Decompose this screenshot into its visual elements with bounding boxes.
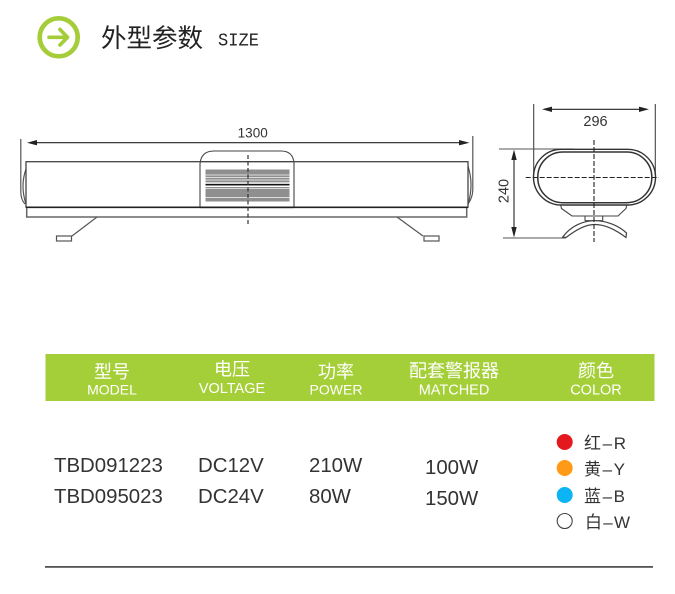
light bar body bbox=[23, 162, 471, 207]
column: voltage bbox=[199, 360, 265, 397]
dimension: 1300 width bbox=[21, 126, 473, 204]
row 1: 100W bbox=[425, 457, 479, 479]
curved base bbox=[563, 221, 626, 238]
header band bbox=[46, 354, 654, 401]
column: matched alarm: MATCHED bbox=[419, 382, 489, 398]
heading: product size: 外型参数 bbox=[101, 25, 203, 53]
column: voltage: 电压 bbox=[214, 360, 250, 380]
front view dimension drawing bbox=[21, 126, 473, 241]
mounting bracket bbox=[561, 205, 627, 221]
icon: green circled arrow bbox=[40, 18, 78, 56]
column: voltage: VOLTAGE bbox=[199, 381, 265, 397]
column: color: COLOR bbox=[570, 382, 622, 398]
row 2: 150W bbox=[425, 488, 479, 510]
right mounting foot bbox=[397, 217, 439, 241]
row 2 bbox=[54, 486, 479, 510]
side view dimension drawing bbox=[496, 104, 659, 242]
row 2: 80W bbox=[309, 486, 352, 508]
legend: white: 白–W bbox=[585, 513, 630, 532]
specification table rows bbox=[54, 455, 479, 510]
dimension: 240 height bbox=[496, 149, 574, 238]
column: matched alarm: 配套警报器 bbox=[409, 361, 499, 381]
centre lines bbox=[526, 140, 659, 242]
heading: SIZE label: SIZE bbox=[218, 32, 259, 52]
legend: red: 红–R bbox=[584, 434, 626, 453]
legend: yellow: 黄–Y bbox=[584, 460, 625, 479]
colour legend bbox=[557, 434, 630, 532]
column: matched alarm bbox=[409, 361, 499, 398]
column: model: MODEL bbox=[87, 382, 137, 398]
dimension: 296 width: 296 bbox=[583, 114, 608, 130]
row 1: 210W bbox=[309, 455, 363, 477]
capsule lamp profile bbox=[534, 149, 656, 205]
left mounting foot bbox=[56, 217, 97, 241]
dimension: 240 height: 240 bbox=[496, 179, 512, 203]
specification table header bbox=[46, 354, 654, 401]
dimension: 296 width bbox=[534, 104, 655, 175]
column: model bbox=[87, 362, 137, 398]
row 2: TBD095023 bbox=[54, 486, 163, 508]
column: model: 型号 bbox=[94, 362, 130, 382]
column: color: 颜色 bbox=[578, 361, 614, 381]
column: color bbox=[570, 361, 622, 398]
bottom rule bbox=[45, 566, 653, 568]
dimension: 1300 width: 1300 bbox=[238, 126, 268, 141]
column: power: POWER bbox=[310, 382, 362, 398]
row 1: TBD091223 bbox=[54, 455, 163, 477]
column: power: 功率 bbox=[318, 362, 354, 382]
row 1 bbox=[54, 455, 479, 479]
column: power bbox=[310, 362, 362, 398]
legend: blue: 蓝–B bbox=[584, 487, 625, 506]
section header bbox=[40, 18, 259, 56]
centre housing with vent bbox=[200, 151, 294, 226]
base plate bbox=[27, 208, 467, 217]
row 2: DC24V bbox=[198, 486, 264, 508]
row 1: DC12V bbox=[198, 455, 264, 477]
